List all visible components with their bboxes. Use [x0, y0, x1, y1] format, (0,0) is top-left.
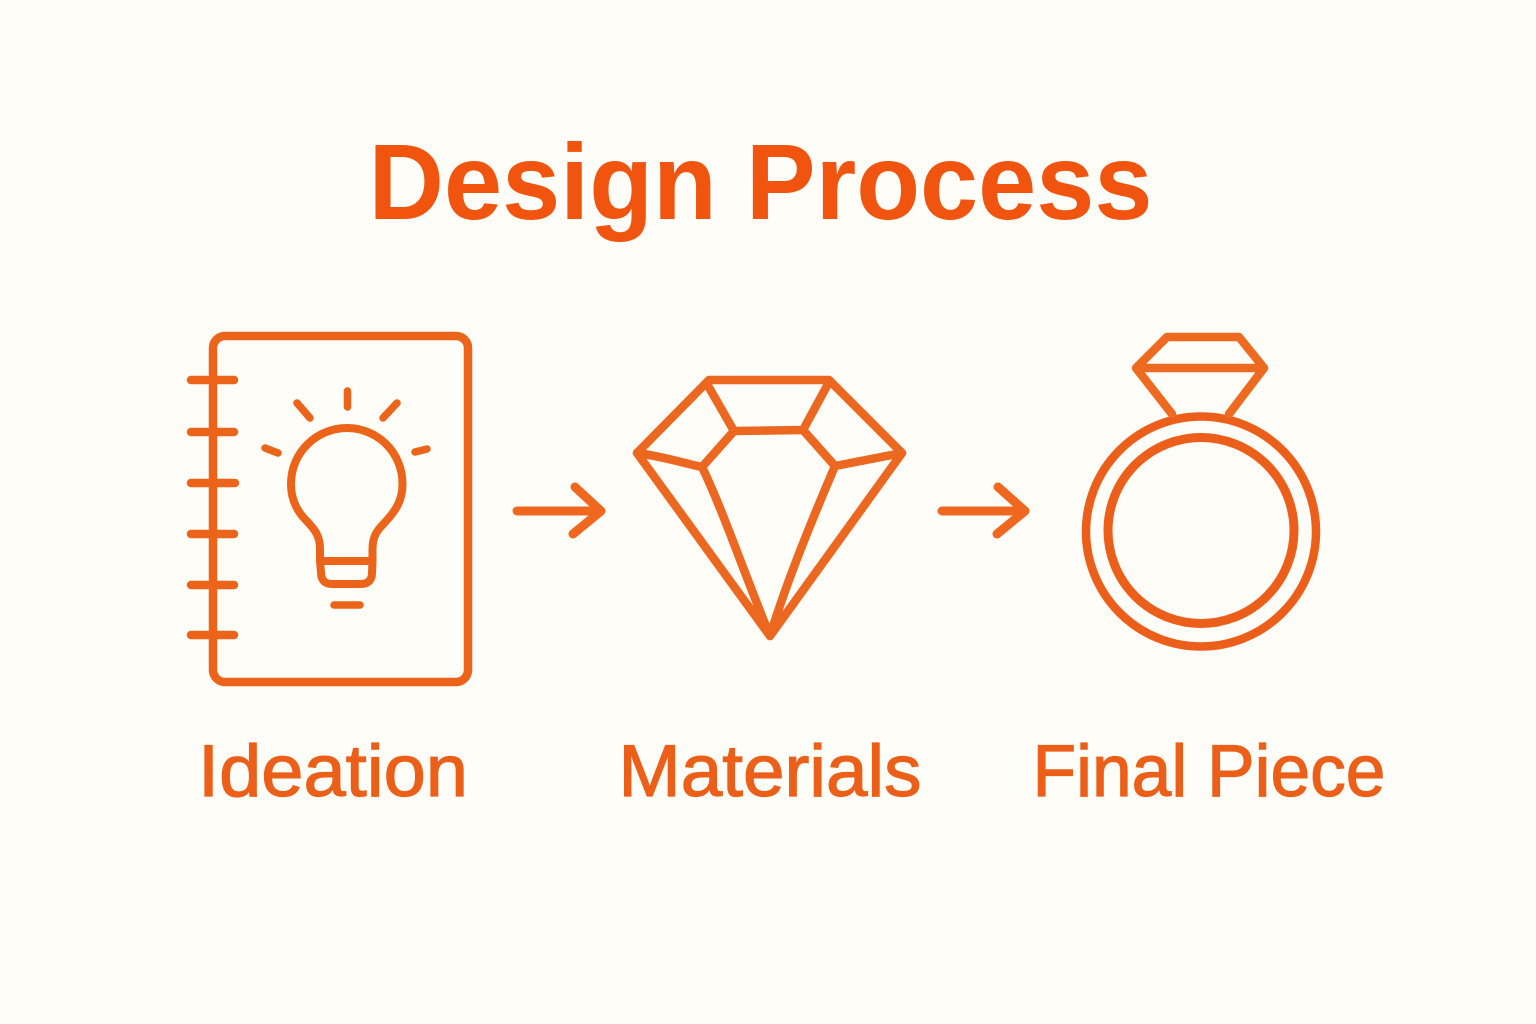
- icon: diamond: [637, 380, 902, 636]
- label: materials: Materials: [618, 731, 922, 812]
- ring gem: [1136, 337, 1264, 414]
- ring band outer: [1086, 416, 1316, 646]
- bulb rays: [265, 391, 427, 453]
- title: Design Process: [368, 121, 1152, 242]
- icon: notebook with light bulb: [191, 336, 468, 682]
- light bulb: [291, 428, 402, 561]
- diamond facets: [637, 384, 902, 636]
- notebook spiral binding: [191, 380, 235, 635]
- label: final piece: Final Piece: [1032, 731, 1386, 812]
- bulb base: [320, 561, 372, 584]
- arrow: ideation to materials: [517, 487, 601, 534]
- icon: ring: [1086, 337, 1316, 646]
- arrow: materials to final piece: [942, 487, 1025, 534]
- notebook cover: [213, 336, 468, 682]
- bulb foot: [334, 601, 360, 609]
- label: ideation: Ideation: [198, 731, 468, 812]
- ring band inner: [1108, 438, 1294, 624]
- diamond outline: [637, 380, 902, 636]
